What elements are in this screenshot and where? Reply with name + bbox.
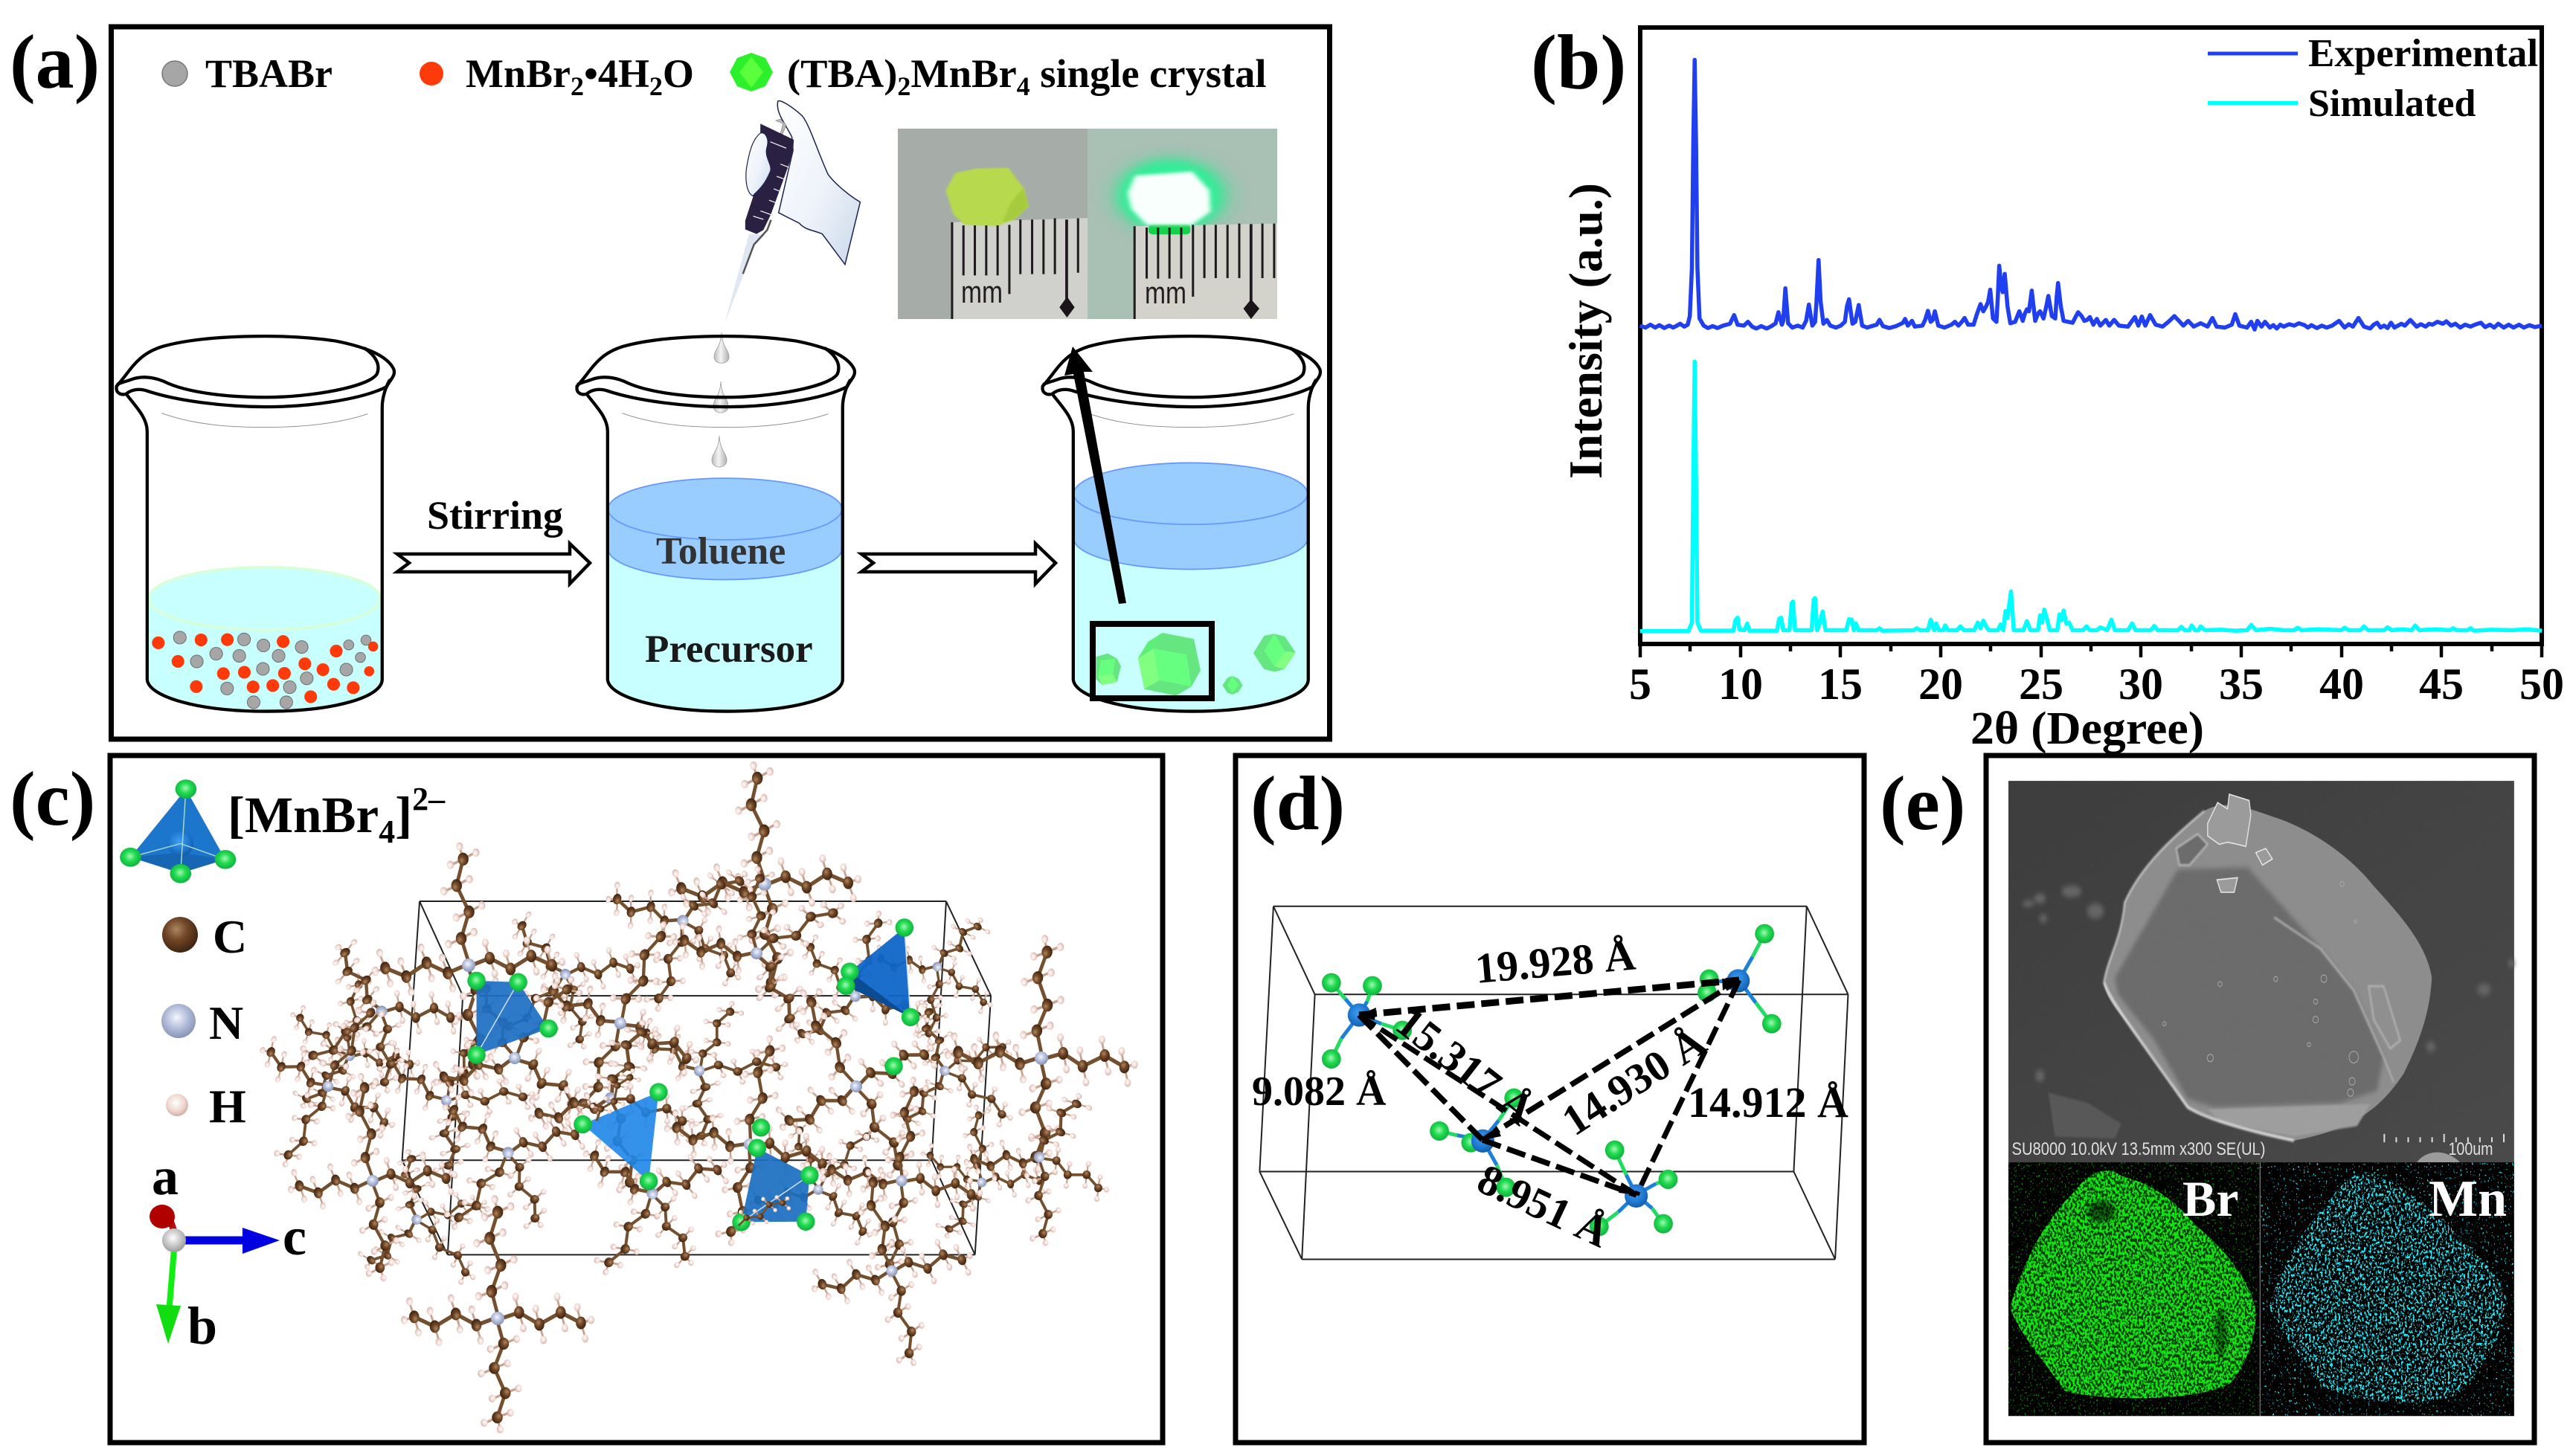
- legend: hydrogen: [166, 1080, 246, 1133]
- panel c label: (c): [10, 756, 95, 842]
- arrow: box to photo: [1064, 347, 1126, 604]
- axis triad: [150, 1147, 306, 1356]
- legend: single crystal: 4: [1017, 71, 1030, 101]
- legend: nitrogen: N: [209, 996, 243, 1049]
- legend: carbon: [162, 910, 247, 963]
- beaker 1: precursor solution with particles: [116, 336, 394, 712]
- legend: carbon: C: [213, 910, 247, 963]
- legend: TBABr: TBABr: [205, 51, 333, 96]
- x axis tick labels: 40: [2319, 660, 2364, 709]
- experimental pattern: [1640, 60, 2542, 329]
- distance labels: 15.317 Å: [1387, 998, 1544, 1135]
- legend: hydrogen: H: [209, 1080, 246, 1133]
- x axis tick labels: 20: [1918, 660, 1963, 709]
- panel d: Mn-Mn distances: [1236, 756, 1864, 1443]
- dashed distance lines: [1359, 980, 1739, 1195]
- panel e frame: [1986, 756, 2534, 1443]
- legend: nitrogen: [161, 996, 243, 1049]
- distance labels: 9.082 Å: [1252, 1069, 1387, 1115]
- distance labels: 14.930 Å: [1553, 1017, 1715, 1145]
- arrow: stirring: [397, 493, 590, 584]
- panel a: synthesis scheme: [10, 19, 1330, 739]
- unit cell: [402, 901, 991, 1254]
- arrow: stirring: Stirring: [427, 493, 563, 538]
- x axis tick labels: [1629, 660, 2564, 709]
- axis triad: c: [283, 1207, 306, 1266]
- x axis ticks: [1640, 644, 2542, 657]
- SEM micrograph: SU8000 10.0kV 13.5mm x300 SE(UL): [2011, 1139, 2266, 1159]
- fragments over tetrahedra: [585, 1060, 795, 1237]
- distance labels: [1252, 930, 1848, 1257]
- x axis tick labels: 45: [2419, 660, 2464, 709]
- legend: single crystal: [730, 51, 1267, 101]
- crystals: [1096, 633, 1296, 696]
- legend: MnBr2 tetrahydrate: MnBr: [466, 51, 571, 96]
- legend: single crystal: single crystal: [1030, 51, 1267, 96]
- legend: MnBr2 tetrahydrate: 2: [649, 71, 663, 101]
- panel b: XRD chart: [1531, 19, 2564, 754]
- legend: MnBr4 tetrahedron: 4: [379, 814, 395, 850]
- legend: MnBr2 tetrahydrate: 2: [571, 71, 584, 101]
- SEM micrograph: [2008, 781, 2515, 1162]
- photo: crystal under ambient light and UV: mm: [1145, 275, 1186, 310]
- panel a frame: [112, 27, 1330, 739]
- axes frame: [1640, 28, 2542, 644]
- legend: experimental: Experimental: [2308, 32, 2538, 75]
- legend: MnBr2 tetrahydrate: O: [663, 51, 694, 96]
- distance labels: 19.928 Å: [1473, 930, 1637, 993]
- axis triad: b: [187, 1296, 217, 1356]
- legend: simulated: Simulated: [2308, 83, 2476, 125]
- legend: single crystal: 2: [897, 71, 910, 101]
- EDS map: Br: Br: [2182, 1170, 2239, 1227]
- legend: MnBr4 tetrahedron: ]: [395, 787, 412, 843]
- x axis tick labels: 30: [2119, 660, 2163, 709]
- legend: MnBr4 tetrahedron: [120, 779, 446, 883]
- beaker 2: toluene over precursor: [576, 336, 855, 712]
- panel c: crystal structure: [10, 754, 1163, 1443]
- x axis tick labels: 50: [2519, 660, 2564, 709]
- legend: MnBr4 tetrahedron: 2–: [412, 781, 446, 817]
- panel a label: (a): [10, 19, 100, 105]
- panel e label: (e): [1880, 761, 1965, 846]
- panel e: SEM and EDS maps: [1880, 756, 2534, 1443]
- panel d frame: [1236, 756, 1864, 1443]
- distance arrowheads: [1359, 979, 1739, 1195]
- simulated pattern: [1640, 361, 2542, 631]
- MnBr4 tetrahedra: [467, 918, 919, 1231]
- icon: gloved hand with pipette: [725, 101, 860, 323]
- panel d label: (d): [1250, 761, 1345, 846]
- legend: MnBr2 tetrahydrate: •4H: [584, 51, 649, 96]
- x axis tick labels: 15: [1818, 660, 1863, 709]
- label: precursor: Precursor: [645, 628, 813, 671]
- MnBr4 units: [1322, 924, 1782, 1236]
- axis triad: a: [152, 1147, 179, 1206]
- EDS map: Br: [2008, 1162, 2260, 1416]
- selection box: [1093, 624, 1212, 698]
- x axis tick labels: 25: [2019, 660, 2063, 709]
- photo: crystal under ambient light and UV: mm: [961, 274, 1003, 309]
- beaker 3: crystals grown at interface: [1042, 336, 1320, 712]
- x axis title: 2θ (Degree): [1970, 703, 2204, 754]
- legend: MnBr2 tetrahydrate: [420, 51, 694, 101]
- arrow: to crystallisation: [861, 544, 1056, 584]
- y axis title: Intensity (a.u.): [1559, 183, 1612, 479]
- distance labels: 8.951 Å: [1471, 1154, 1617, 1257]
- EDS map: Mn: [2260, 1162, 2514, 1416]
- photo: crystal under ambient light and UV: [898, 129, 1277, 319]
- unit cell box: [1259, 906, 1848, 1259]
- droplets: [712, 332, 729, 467]
- legend: MnBr4 tetrahedron: [MnBr: [228, 787, 379, 843]
- EDS map: Mn: Mn: [2429, 1170, 2507, 1228]
- panel c frame: [110, 756, 1163, 1443]
- SEM micrograph: 100um: [2449, 1139, 2493, 1159]
- molecules: tetrabutylammonium cations: [214, 754, 1149, 1434]
- label: toluene: Toluene: [656, 530, 786, 573]
- x axis tick labels: 10: [1718, 660, 1763, 709]
- panel b label: (b): [1531, 19, 1626, 106]
- x axis tick labels: 5: [1629, 660, 1651, 709]
- legend: single crystal: (TBA): [787, 51, 897, 96]
- distance labels: 14.912 Å: [1688, 1078, 1848, 1127]
- x axis tick labels: 35: [2219, 660, 2264, 709]
- legend: single crystal: MnBr: [910, 51, 1017, 96]
